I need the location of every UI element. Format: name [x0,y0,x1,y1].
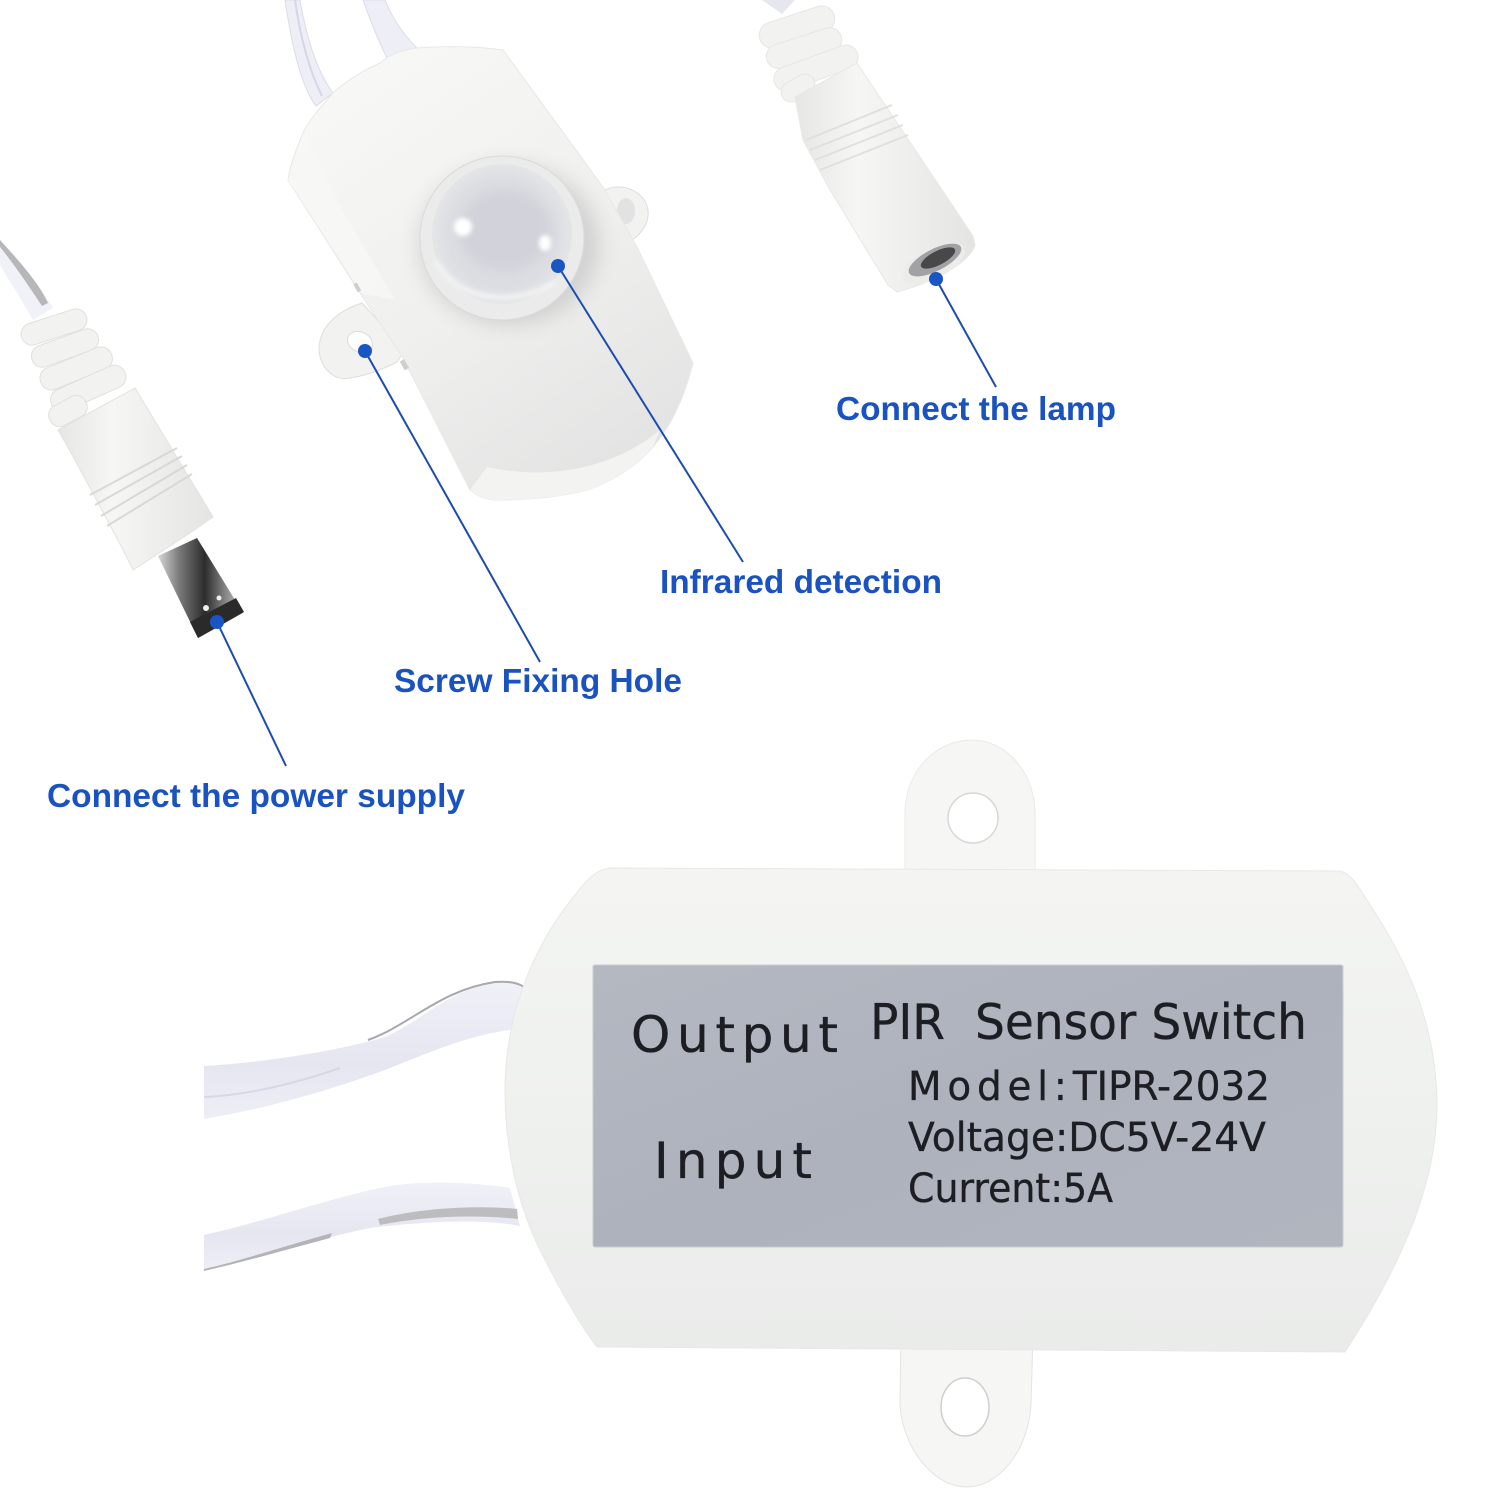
housing lower facet [470,430,660,500]
socket body [795,63,975,292]
callout: infrared detection: Infrared detection [660,563,942,600]
socket cable [762,0,795,14]
module body [505,868,1437,1352]
strain relief ribs [18,306,129,430]
infrared lens dome [420,156,584,320]
bottom mounting tab [900,1335,1033,1487]
callout: screw fixing hole: Screw Fixing Hole [394,662,682,699]
housing left bevel [288,133,395,300]
callout: screw fixing hole [358,344,682,699]
plug body [58,388,213,570]
sensor cables [285,0,417,106]
model text: Model:TIPR-2032 [908,1064,1270,1110]
output port text: Output [631,1006,838,1064]
upper mounting hole [948,793,998,843]
socket strain relief ribs [756,3,861,106]
mounting tab right [605,187,648,245]
specification label [593,965,1343,1247]
plug body grooves [90,448,192,526]
module cables [204,982,525,1271]
socket grooves [806,105,908,170]
PIR sensor unit [285,0,693,500]
callout: connect the lamp [836,272,1116,427]
DC male plug [0,240,244,638]
top mounting tab [905,740,1035,885]
voltage text: Voltage:DC5V-24V [908,1115,1267,1161]
product name text: PIR Sensor Switch [870,994,1307,1051]
callout: infrared detection [551,259,942,600]
metal pin [158,538,244,638]
dome shadow [398,145,622,345]
side slots [353,283,409,370]
socket opening [897,234,971,292]
mounting tab left [319,303,405,379]
lower mounting hole [941,1378,989,1436]
plug cable [0,240,53,320]
DC female socket [756,0,975,292]
callout: connect the lamp: Connect the lamp [836,390,1116,427]
current text: Current:5A [908,1166,1114,1212]
input port text: Input [654,1132,812,1190]
PIR module housing [505,740,1437,1487]
callout: connect the power supply [47,615,466,814]
input cable [204,1183,520,1271]
sensor housing [288,47,693,500]
callout: connect the power supply: Connect the power supply [47,777,466,814]
output cable [204,982,525,1119]
